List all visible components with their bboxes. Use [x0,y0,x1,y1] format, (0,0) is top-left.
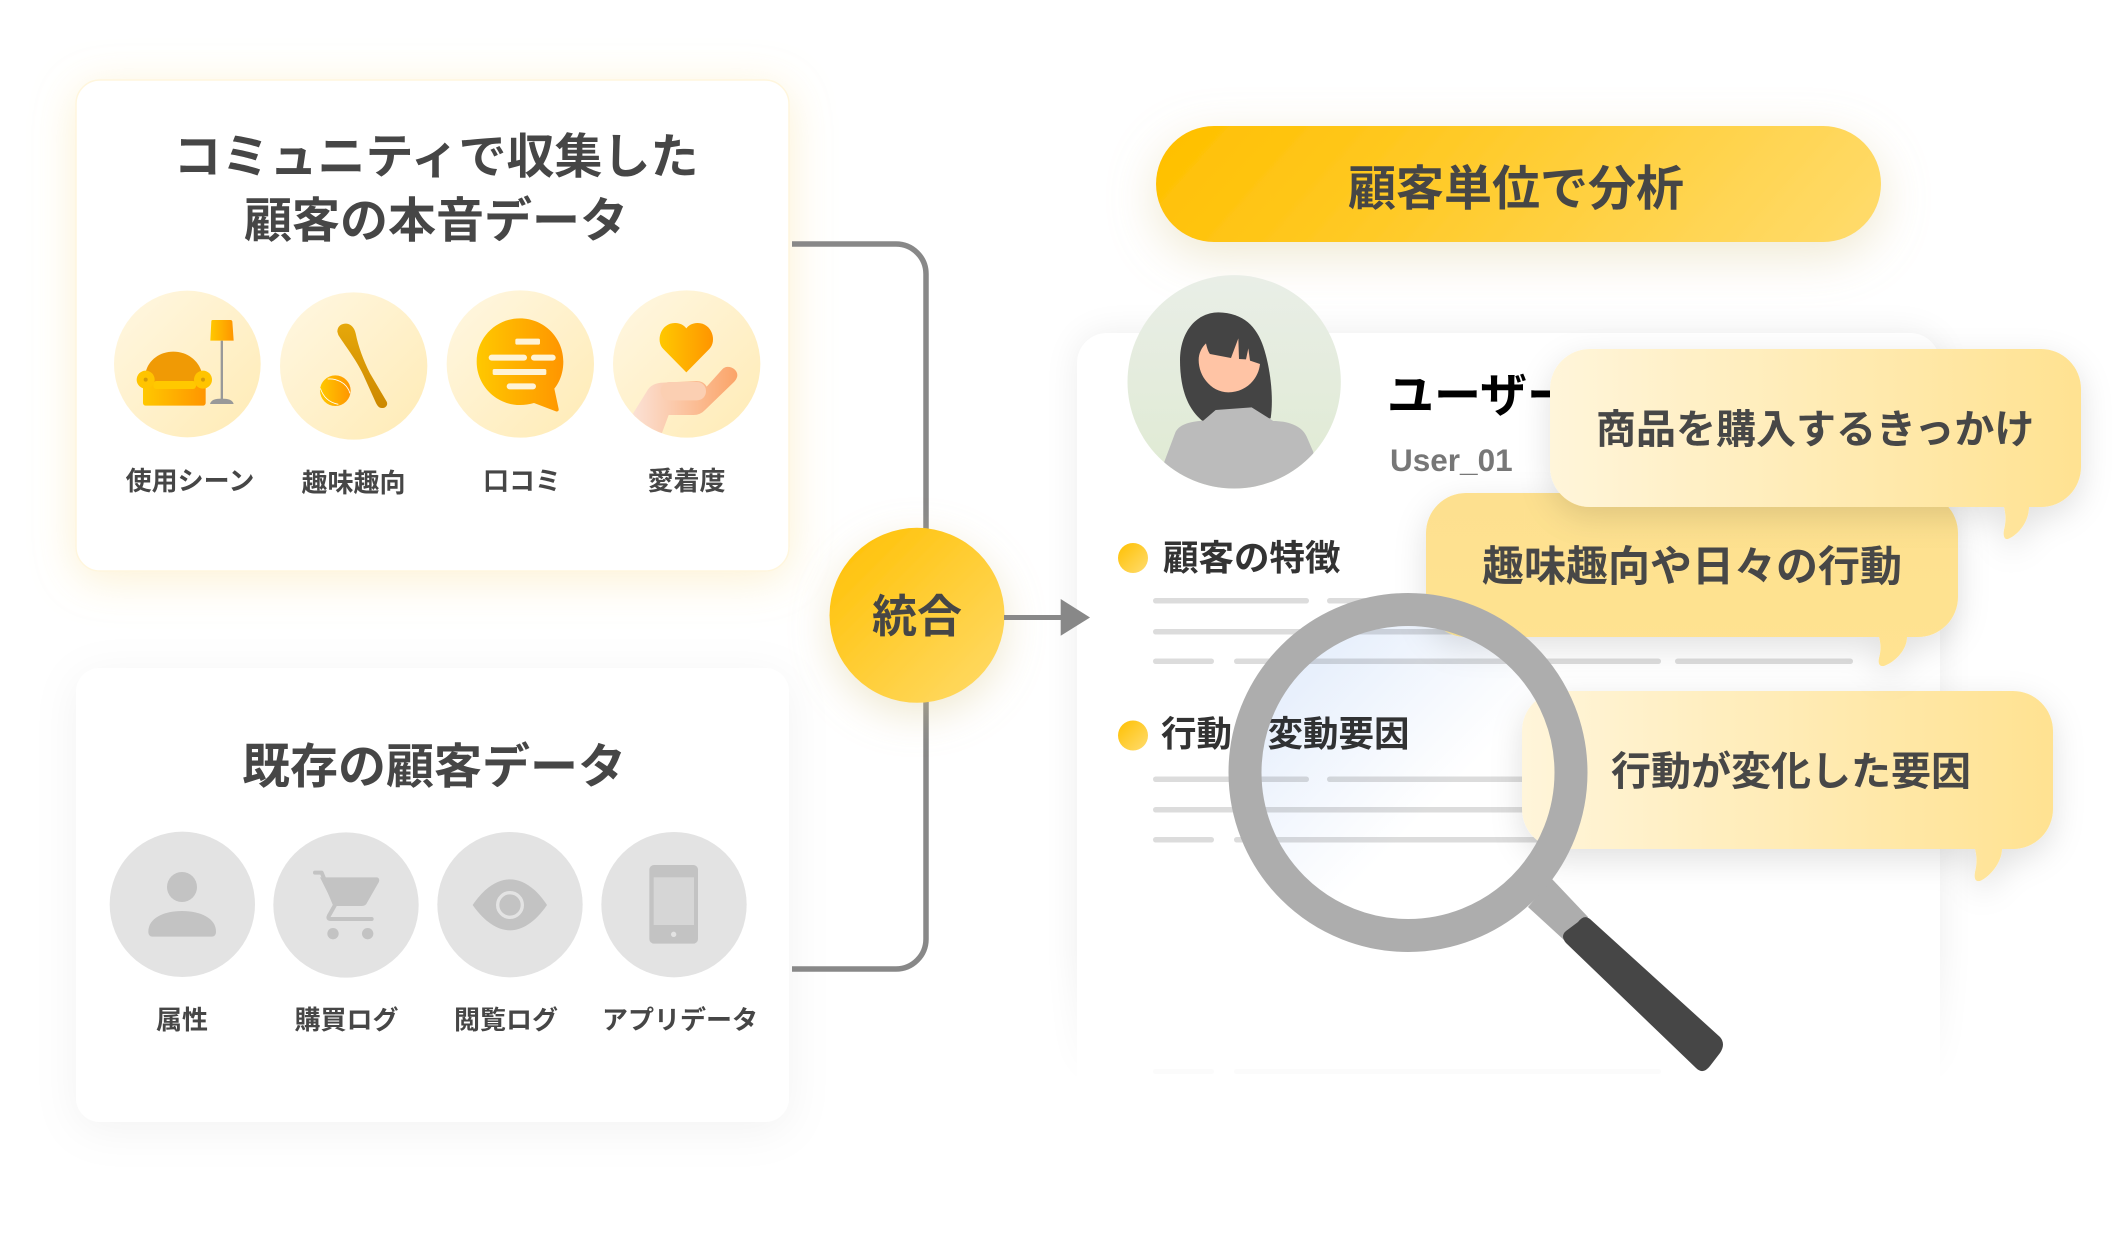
heading: existing data: 既存の顧客データ [242,741,626,794]
icon: cart [273,832,419,978]
icon: speech bubble [447,290,594,438]
icon: person [110,832,255,977]
label: アプリデータ: アプリデータ [602,1005,758,1035]
node: 統合: 統合 [872,591,962,642]
user id: User_01 [1390,442,1513,478]
header pill [1156,126,1881,242]
icon: eye [437,832,583,977]
arrow [1004,599,1090,636]
bracket connector [792,244,926,969]
user name: ユーザー [1387,369,1574,422]
icon: smartphone [601,832,747,977]
text placeholder lines: factors [1153,776,1753,842]
icon: heart in hand [613,290,760,438]
heading: community data: 顧客の本音データ [244,195,628,248]
node: 統合 [830,528,1004,703]
heading: customer traits: 顧客の特徴 [1163,538,1341,578]
callout: hobbies and daily behaviour: 趣味趣向や日々の行動 [1482,543,1902,590]
callout: hobbies and daily behaviour [1426,493,1958,666]
header pill: 顧客単位で分析 [1348,163,1684,216]
label: 趣味趣向: 趣味趣向 [301,468,406,498]
panel: community data [76,80,789,571]
label: 愛着度: 愛着度 [647,466,726,496]
icon: bat and ball [280,292,427,440]
panel: existing data [76,668,789,1122]
callout: purchase trigger [1550,349,2081,539]
text placeholder lines: traits [1153,598,1853,664]
callout: behaviour change [1522,691,2053,881]
avatar [1127,275,1341,503]
label: 属性: 属性 [156,1005,208,1035]
callout: purchase trigger: 商品を購入するきっかけ [1596,408,2034,452]
magnifying glass [1245,610,1723,1071]
bullet: behaviour factors [1118,720,1148,750]
label: 購買ログ: 購買ログ [294,1005,399,1035]
label: 口コミ: 口コミ [483,466,561,496]
callout: behaviour change: 行動が変化した要因 [1611,750,1971,794]
heading: community data: コミュニティで収集した [173,131,699,184]
label: 使用シーン: 使用シーン [126,466,254,496]
panel: user card [1076,275,1942,957]
heading: community data [173,131,699,248]
icon: sofa and lamp [114,291,261,437]
bullet: customer traits [1118,543,1148,573]
label: 閲覧ログ: 閲覧ログ [454,1005,558,1035]
heading: behaviour factors: 行動の変動要因 [1161,714,1410,754]
faded placeholder line [1153,1069,1661,1074]
